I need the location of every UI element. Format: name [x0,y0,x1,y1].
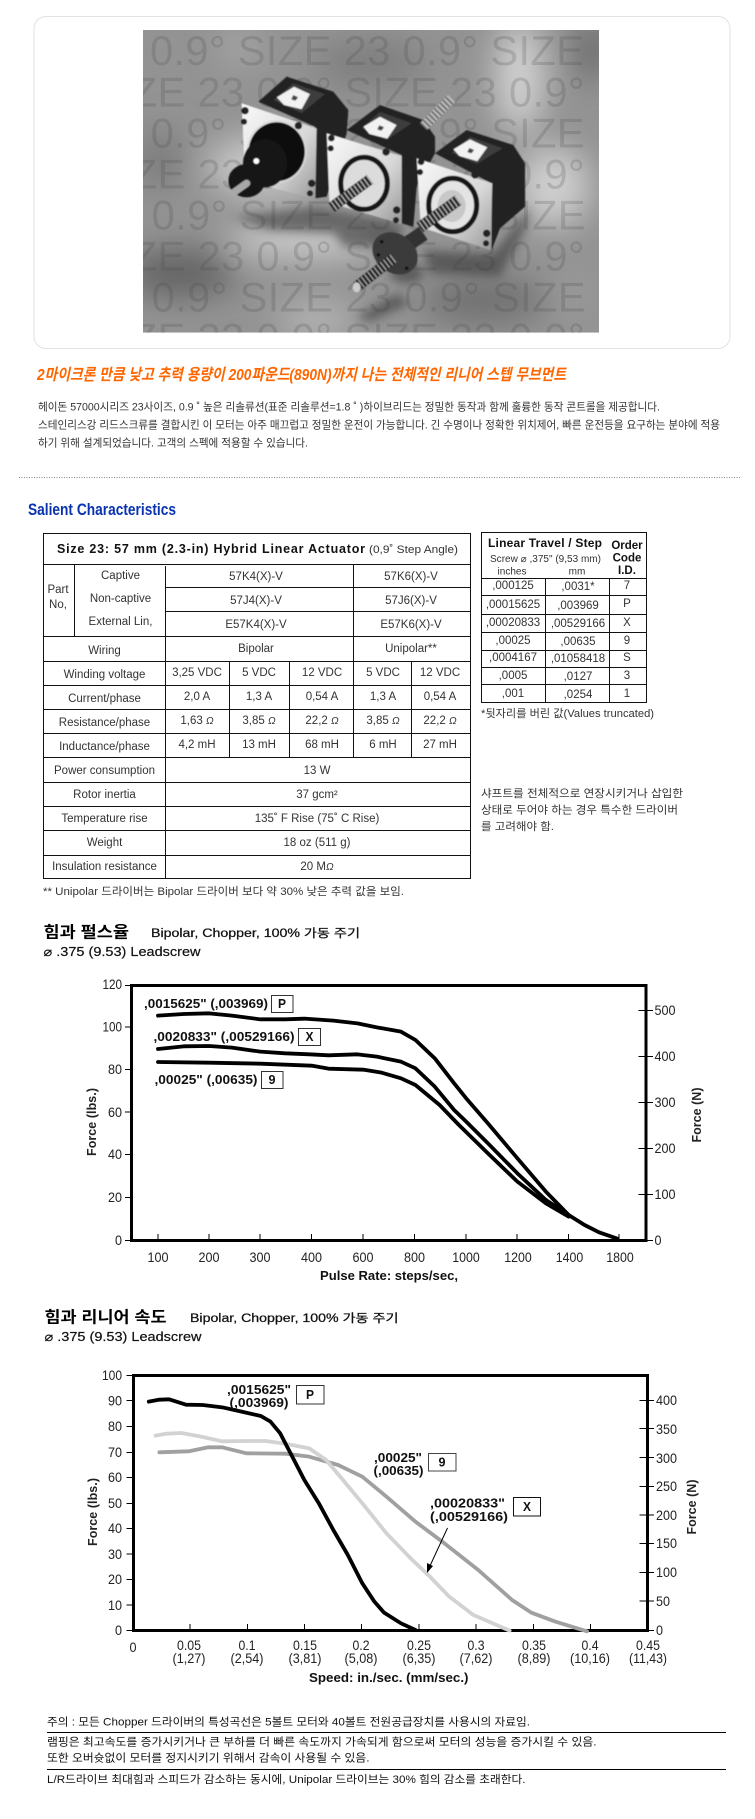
table cells: 135˚ F Rise (75˚ C Rise) [255,813,379,825]
table cells: 1,3 A [246,691,272,703]
right axis labels [654,1002,676,1248]
table cells: Current/phase [68,693,141,705]
left axis labels: 20 [108,1571,122,1587]
table cells: 57K4(X)-V [229,571,283,583]
table title: Size 23: 57 mm (2.3-in) Hybrid Linear Actuator [57,542,365,556]
right axis labels [656,1392,677,1638]
text block: product description: 스테인리스강 리드스크류를 결합시킨 이 모터는 아주 매끄럽고 정밀한 운전이 가능합니다. 긴 수명이나 정확한 위치제어, 빠른 운전등을 요구하는 분야에 적용 [38,418,720,432]
x axis labels: 0.15 [293,1637,317,1653]
table cells: Part [47,584,69,596]
y axis title right: Force (N) [690,1088,704,1142]
notes: bottom: 주의 : 모든 Chopper 드라이버의 특성곡선은 5볼트 모터와 40볼트 전원공급장치를 사용시의 자료임. [47,1716,530,1728]
table cells: 20 MΩ [300,861,334,873]
curve label P [227,1382,324,1410]
photo: three linear actuator motors: 0.9° SIZE 23 0.9° SIZE [152,274,586,321]
curve label P: ,0015625" [227,1382,291,1397]
left axis labels: 60 [108,1469,122,1485]
left axis labels: 30 [108,1546,122,1562]
table cells: 3,85 Ω [366,715,400,727]
curve label P: (,003969) [230,1395,288,1410]
x axis labels: (2,54) [230,1650,264,1666]
table rows: 7 [624,580,630,592]
table header: Linear Travel / Step [488,536,602,550]
x axis labels: 300 [250,1249,271,1265]
x axis labels: (3,81) [288,1650,322,1666]
table rows: ,00025 [495,635,531,647]
x axis labels: 0.35 [522,1637,546,1653]
photo: three linear actuator motors: 0.9° SIZE 23 0.9° SIZE [151,109,585,156]
table cells: Non-captive [90,593,151,605]
curve label 9: ,00025" [374,1450,422,1465]
y axis title left: Force (lbs.) [85,1088,99,1156]
table cells: Wiring [88,645,121,657]
note: special driver: 를 고려해야 함. [481,819,554,833]
table rows: S [623,652,631,664]
x axis title: Pulse Rate: steps/sec, [320,1268,458,1283]
table cells: 37 gcm² [296,789,338,801]
x axis labels: 1000 [452,1249,480,1265]
right axis labels: 250 [656,1478,677,1494]
heading: force vs linear speed: ⌀ .375 (9.53) Leadscrew [44,1330,203,1344]
x axis labels: 0.05 [177,1637,201,1653]
table cells: Unipolar** [385,643,437,655]
note: values truncated: *뒷자리를 버린 값(Values truncated) [481,707,654,720]
table cells: Inductance/phase [59,741,150,753]
table cells: 5 VDC [242,667,276,679]
left axis labels: 0 [115,1232,122,1248]
force curves [158,1013,617,1239]
arrow: X label to curve [427,1528,448,1573]
notes: bottom: L/R드라이브 최대힘과 스피드가 감소하는 동시에, Unipolar 드라이브는 30% 힘의 감소를 초래한다. [47,1772,526,1786]
y axis title right: Force (N) [685,1480,699,1534]
notes: bottom [47,1716,726,1786]
x axis labels: (8,89) [518,1650,550,1666]
right axis labels: 350 [656,1421,677,1437]
left axis labels: 100 [102,1018,122,1034]
table rows: ,01058418 [551,653,605,665]
curve label 9 [374,1450,456,1478]
panel: product photo card [34,16,730,362]
curve label X: X [306,1029,314,1044]
table cells: 57K6(X)-V [384,571,438,583]
table: specifications [43,534,470,879]
left axis labels: 20 [108,1189,122,1205]
right axis labels: 100 [654,1186,676,1202]
footnote: unipolar: ** Unipolar 드라이버는 Bipolar 드라이버 보다 약 30% 낮은 추력 값을 보임. [43,884,404,898]
x axis labels: 100 [148,1249,169,1265]
table cells: 5 VDC [366,667,400,679]
right axis labels: 0 [656,1622,663,1638]
right axis labels: 500 [654,1002,676,1018]
table cells: 68 mH [305,739,339,751]
table cells: 22,2 Ω [305,715,339,727]
table cells: 4,2 mH [178,739,216,751]
table header [488,536,643,578]
note: special driver: 상태로 두어야 하는 경우 특수한 드라이버 [481,802,678,816]
heading: force vs pulse rate: 힘과 펄스율 [44,924,129,942]
curve label 9: ,00025" (,00635) [154,1072,258,1087]
curve label X: X [523,1499,531,1514]
table cells: Resistance/phase [59,717,150,729]
motor 2 [347,105,435,227]
x axis labels: (1,27) [172,1650,206,1666]
table cells: Captive [101,570,140,582]
table cells: 6 mH [369,739,397,751]
curve label X: (,00529166) [430,1509,508,1524]
chart: force vs pulse rate [85,976,704,1283]
table rows: ,0127 [564,671,592,683]
x axis labels [148,1249,634,1265]
text block: product description: 하기 위해 설계되었습니다. 고객의 스펙에 적용할 수 있습니다. [38,436,308,450]
right axis labels: 200 [656,1507,677,1523]
table header: Code [613,552,641,564]
heading: force vs linear speed: 힘과 리니어 속도 [44,1308,167,1326]
heading: force vs pulse rate [44,924,360,959]
table rows: 3 [624,670,630,682]
motor 1 [258,77,348,198]
heading: force vs linear speed: Bipolar, Chopper, 100% 가동 주기 [190,1312,398,1325]
table rows: ,00529166 [551,618,605,630]
table cells: Winding voltage [64,669,145,681]
x axis labels: (7,62) [460,1650,492,1666]
table cells: Weight [87,837,123,849]
curve label 9: (,00635) [374,1463,424,1478]
table rows: P [623,598,631,610]
curve label X: ,0020833" (,00529166) [154,1029,294,1044]
x axis labels: 0.45 [636,1637,660,1653]
motor 3 [435,130,525,250]
heading: orange subtitle: 2마이크론 만큼 낮고 추력 용량이 200파운드(890N)까지 나는 전체적인 리니어 스텝 무브먼트 [36,366,567,384]
table rows: ,00015625 [486,599,540,611]
x axis labels: 0.1 [238,1637,256,1653]
x axis labels: 0 [130,1639,137,1655]
table cells: External Lin, [89,616,152,628]
x axis labels: (10,16) [570,1650,610,1666]
left axis labels: 0 [115,1622,122,1638]
text block: product description [38,400,720,450]
x axis labels: 400 [301,1249,322,1265]
curve label X: ,00020833" [430,1496,505,1510]
left axis labels: 40 [108,1146,122,1162]
y axis title left: Force (lbs.) [86,1478,100,1546]
table: linear travel per step [481,532,647,703]
table cells: 13 mH [242,739,276,751]
left axis labels: 90 [108,1392,122,1408]
curve label X [430,1496,540,1524]
x axis labels: (6,35) [402,1650,436,1666]
table cells: Insulation resistance [52,861,157,873]
left axis labels [102,976,122,1248]
table rows: ,0004167 [489,652,537,664]
table cells: 1,63 Ω [180,715,214,727]
table cells [47,570,460,873]
x axis labels: 0.25 [407,1637,431,1653]
force curves [149,1399,587,1631]
table cells: 1,3 A [370,691,396,703]
note: special driver [481,787,683,833]
x axis labels: (11,43) [629,1650,667,1666]
table header: inches [498,566,526,578]
table cells: E57K6(X)-V [380,619,442,631]
x axis labels: 800 [404,1249,425,1265]
right axis labels: 200 [654,1140,676,1156]
table cells: E57K4(X)-V [225,619,287,631]
curve label 9: 9 [438,1454,446,1470]
table rows: ,00635 [560,636,596,648]
x axis labels: 600 [352,1249,374,1265]
photo: three linear actuator motors: 0.9° SIZE 23 0.9° SIZE [152,191,586,238]
photo: three linear actuator motors: SIZE 23 0.9° SIZE 23 0.9° [92,69,585,116]
curve label 9 [154,1072,283,1088]
left axis labels: 100 [102,1367,122,1383]
table cells: 0,54 A [306,691,339,703]
curve label P: P [278,996,286,1011]
table rows: ,001 [502,688,524,700]
table rows: ,000125 [492,580,534,592]
curve label P: ,0015625" (,003969) [144,996,268,1011]
x axis labels: 1800 [606,1249,634,1265]
right axis labels: 400 [654,1048,676,1064]
left axis labels: 50 [108,1495,122,1511]
table title: (0,9˚ Step Angle) [369,544,458,556]
photo: three linear actuator motors: SIZE 23 0.9° SIZE 23 0.9° [92,233,585,280]
right axis labels: 150 [656,1535,677,1551]
table cells: 57J6(X)-V [385,595,437,607]
table rows: X [623,617,631,629]
table cells: 0,54 A [424,691,457,703]
x axis labels: 1400 [556,1249,583,1265]
left axis labels: 80 [108,1418,122,1434]
table header: Order [611,540,643,552]
left axis labels: 40 [108,1520,122,1536]
table header: Screw ⌀ ,375" (9,53 mm) [490,554,601,565]
notes: bottom: 램핑은 최고속도를 증가시키거나 큰 부하를 더 빠른 속도까지 가속되게 함으로써 모터의 성능을 증가시킬 수 있음. [47,1734,596,1748]
right axis labels: 0 [654,1232,662,1248]
x axis labels: 0.2 [352,1637,370,1653]
chart: force vs linear speed [86,1367,699,1685]
left axis labels: 60 [108,1104,122,1120]
table cells: 13 W [304,765,331,777]
table cells: 27 mH [423,739,457,751]
photo: three linear actuator motors: 0.9° SIZE 23 0.9° SIZE [150,27,584,74]
left axis labels [102,1367,122,1638]
right axis labels: 300 [654,1094,676,1110]
x axis labels: (5,08) [344,1650,378,1666]
right axis labels: 300 [656,1450,677,1466]
table rows [486,580,631,701]
table rows: ,0254 [564,689,593,701]
photo: three linear actuator motors [143,30,599,333]
heading: force vs pulse rate: ⌀ .375 (9.53) Leadscrew [44,945,202,959]
table cells: Rotor inertia [73,789,136,801]
table cells: 12 VDC [420,667,460,679]
right axis labels: 100 [656,1564,677,1580]
left axis labels: 80 [108,1061,122,1077]
table cells: Bipolar [238,643,274,655]
table rows: ,00020833 [486,617,540,629]
table cells: 3,85 Ω [242,715,276,727]
heading: Salient Characteristics: Salient Characteristics [28,500,176,519]
table cells: 2,0 A [184,691,210,703]
table cells: 22,2 Ω [423,715,457,727]
table rows: 1 [624,688,630,700]
right axis labels: 400 [656,1392,677,1408]
table cells: Power consumption [54,765,155,777]
table cells: Temperature rise [61,813,148,825]
left axis labels: 70 [108,1444,122,1460]
right axis labels: 50 [656,1593,670,1609]
table cells: 3,25 VDC [172,667,222,679]
x axis labels: 0.3 [468,1637,485,1653]
heading: force vs pulse rate: Bipolar, Chopper, 100% 가동 주기 [151,927,360,940]
text block: product description: 헤이돈 57000시리즈 23사이즈, 0.9 ˚ 높은 리솔류션(표준 리솔루션=1.8 ˚ )하이브리드는 정밀한 동작과 함께 훌륭한 동작 콘트롤을 제공합니다. [38,400,660,414]
table rows: ,0031* [561,581,595,593]
table cells: 18 oz (511 g) [284,837,351,849]
note: special driver: 샤프트를 전체적으로 연장시키거나 삽입한 [481,787,683,800]
curve label 9: 9 [268,1072,276,1087]
photo: three linear actuator motors: SIZE 23 0.9° SIZE 23 0.9° [92,315,585,362]
table rows: ,0005 [499,670,527,682]
table header: I.D. [618,565,636,577]
photo: three linear actuator motors: SIZE 23 0.9° SIZE 23 0.9° [92,150,585,197]
curve label P: P [306,1387,314,1402]
left axis labels: 10 [108,1597,122,1613]
notes: bottom: 또한 오버슛없이 모터를 정지시키기 위해서 감속이 사용될 수 있음. [47,1750,369,1764]
x axis title: Speed: in./sec. (mm/sec.) [309,1670,468,1685]
x axis labels [130,1637,667,1666]
table cells: No, [49,599,67,611]
table rows: 9 [624,635,630,647]
table cells: 12 VDC [302,667,342,679]
x axis labels: 0.4 [582,1637,599,1653]
left axis labels: 120 [102,976,122,992]
table rows: ,003969 [557,600,599,612]
x axis labels: 1200 [504,1249,532,1265]
table header: mm [569,566,585,578]
table cells: 57J4(X)-V [230,595,282,607]
heading: force vs linear speed [44,1308,398,1344]
x axis labels: 200 [198,1249,220,1265]
